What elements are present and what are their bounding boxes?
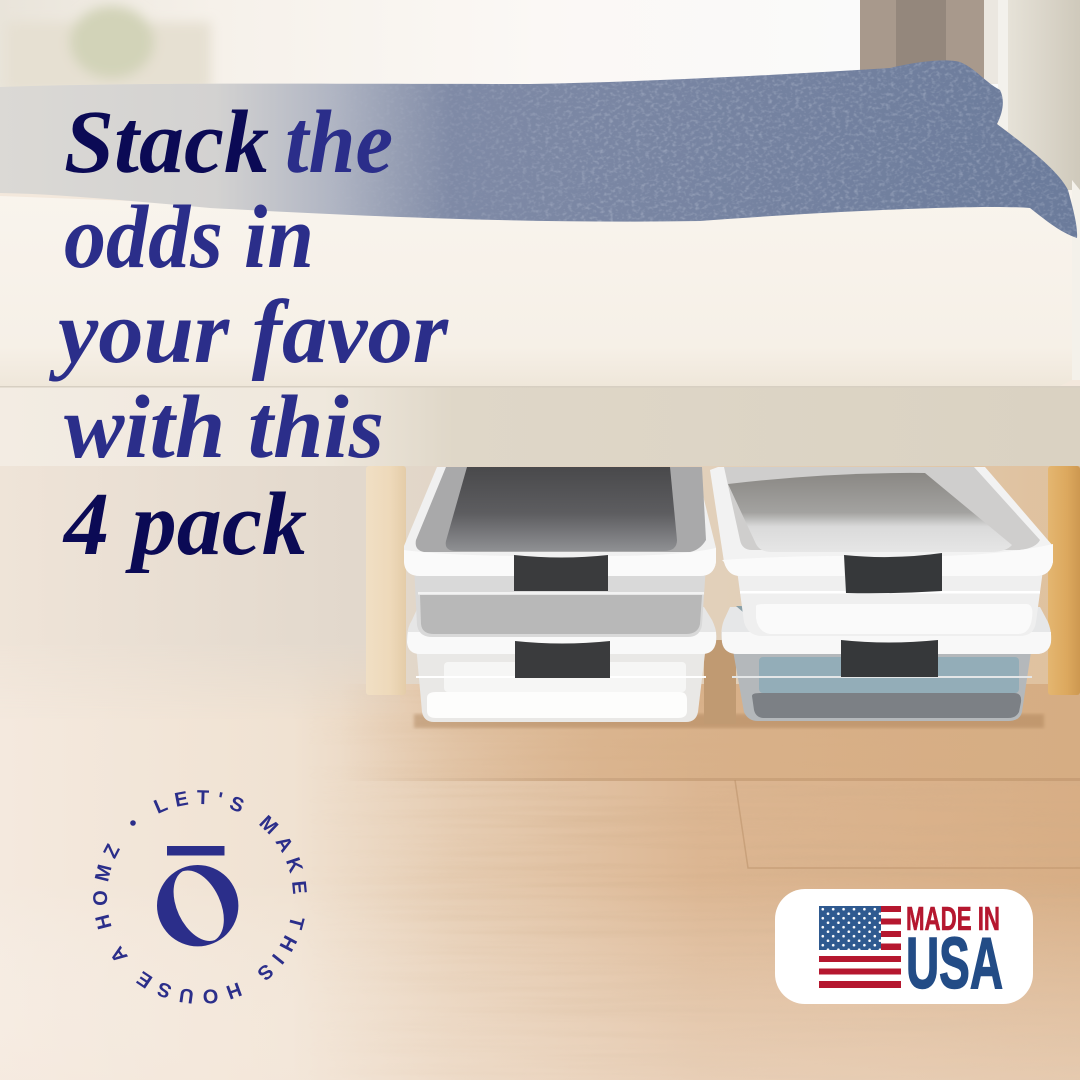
title: the: [285, 93, 393, 192]
shadow under the bins: [414, 640, 1044, 728]
title: Stack: [64, 93, 269, 192]
logo badge: LET'S MAKE THIS HOUSE A HOMZ: [93, 790, 307, 1004]
logo mark: bar: [167, 846, 224, 856]
title: [48, 93, 449, 574]
latch: [515, 641, 610, 678]
bed leg: right: [1048, 466, 1080, 695]
bed leg: left: [366, 466, 406, 695]
bin: bottom right: [721, 606, 1051, 721]
bin: bottom left: [407, 607, 716, 722]
title: with this: [64, 378, 384, 477]
bin: top right: [710, 467, 1053, 636]
latch: [514, 555, 608, 591]
separator dot: [130, 820, 136, 826]
logo mark: ring: [157, 865, 238, 946]
floor plank seams: [340, 778, 1080, 868]
flag icon: [819, 906, 901, 988]
title: odds in: [64, 188, 314, 287]
made in USA badge: [775, 889, 1033, 1004]
mattress right side sliver: [1072, 180, 1080, 380]
circular slogan: [107, 804, 293, 990]
bed mattress: [0, 190, 1072, 386]
bin: top left: [404, 467, 716, 637]
blanket: [0, 55, 1080, 245]
floor: [243, 670, 1080, 1080]
title: 4 pack: [62, 475, 307, 574]
USA text: USA: [906, 924, 1003, 1004]
floor strip under the bed: [340, 684, 1080, 778]
made in text: MADE IN: [906, 900, 1000, 937]
bed frame: [0, 386, 1080, 466]
background: wall and window: [0, 0, 1080, 190]
wall under the bed: [134, 466, 1080, 684]
latch: [844, 553, 942, 593]
storage bins: [404, 467, 1053, 722]
title: your favor: [48, 283, 449, 382]
latch: [841, 640, 938, 677]
